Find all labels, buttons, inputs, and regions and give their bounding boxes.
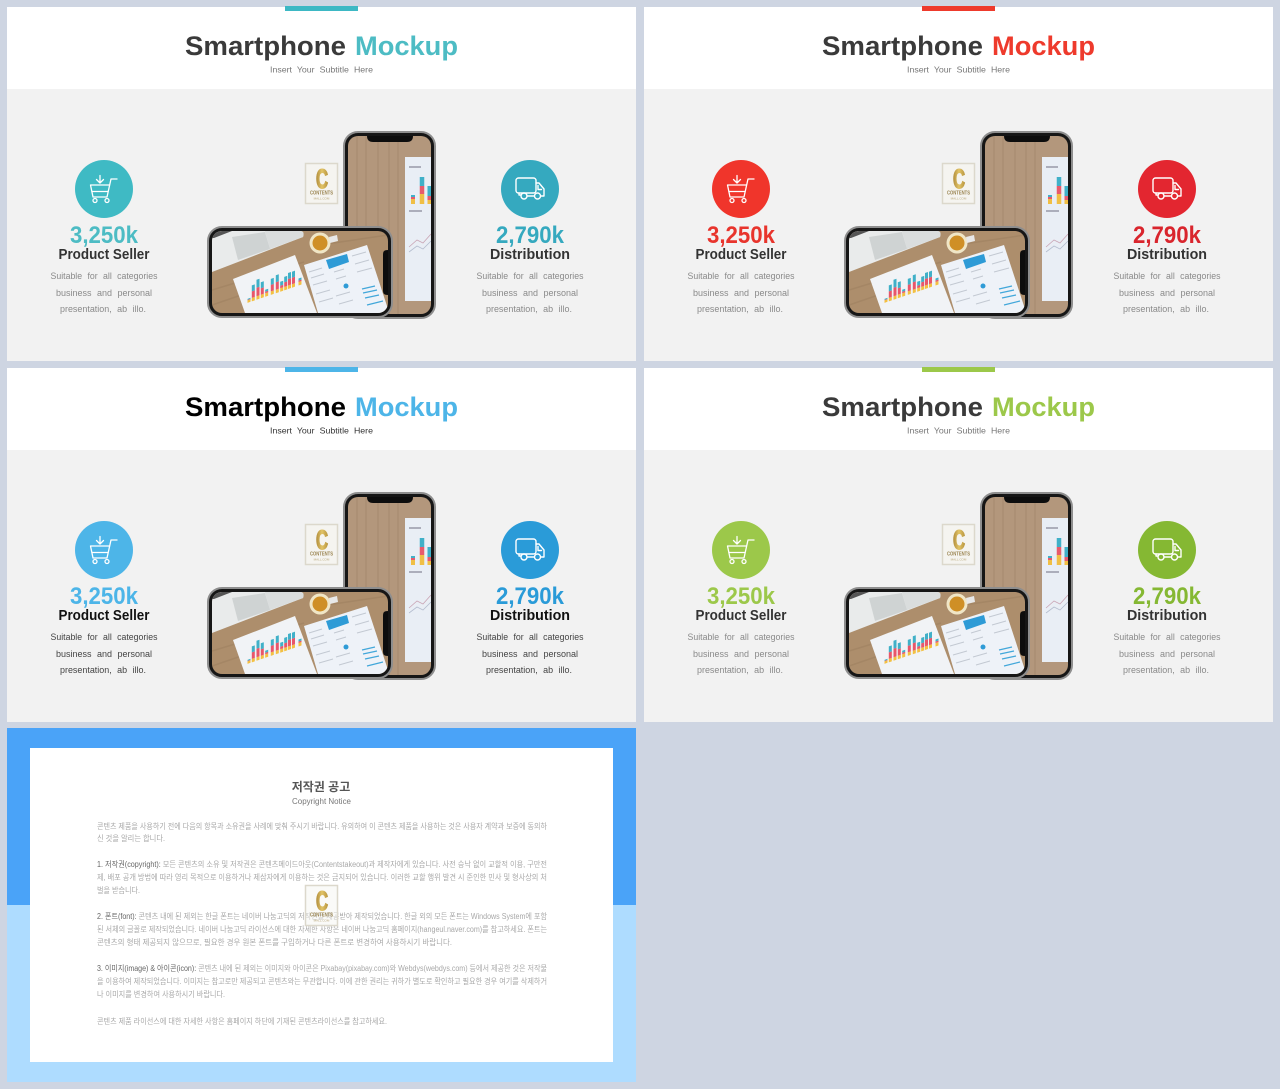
logo watermark — [942, 164, 974, 204]
phone mockups — [845, 493, 1072, 679]
text block right — [1114, 632, 1221, 675]
subtitle: Insert Your Subtitle Here — [907, 426, 1010, 436]
stat: 3,250k: 3,250k — [707, 583, 776, 610]
phone mockups — [845, 132, 1072, 318]
panel body — [644, 450, 1273, 722]
text block right — [1114, 271, 1221, 314]
clause 1: copyright: 제, 배포 공개 방법에 따라 영리 목적으로 이용하거나 제삼자에게 이용하는 것은 금지되어 있습니다. 이러한 교할 행위 발견 시 준인한 민사 및 형사상의 처 — [97, 872, 547, 882]
text block right: Suitable for all categories — [476, 271, 584, 281]
clause 1: copyright: 1. 저작권(copyright): 모든 콘텐츠의 소유 및 저작권은 콘텐츠메이드아웃(Contentstakeout)과 제작자에게 있습니다. 사전 승낙 없이 교할적 이용, 구만전 — [97, 859, 547, 869]
heading: Product Seller: Product Seller — [696, 608, 787, 624]
logo watermark: C — [316, 886, 328, 916]
title: Smartphone — [185, 31, 346, 61]
text block left: presentation, ab illo. — [60, 304, 146, 314]
subtitle: Insert Your Subtitle Here — [907, 64, 1010, 74]
logo watermark — [306, 164, 338, 204]
text block right: Suitable for all categories — [1114, 632, 1221, 642]
accent bar — [922, 6, 995, 11]
text block right: presentation, ab illo. — [486, 304, 572, 314]
intro paragraph: 콘텐츠 제품을 사용하기 전에 다음의 항목과 소유권을 사례에 맞춰 주시기 바랍니다. 유의하여 이 콘텐츠 제품을 사용하는 것은 사용자 계약과 보증에 동의하 — [97, 821, 548, 831]
icon: cart — [712, 160, 770, 218]
slide: green — [644, 367, 1273, 722]
panel header — [7, 368, 636, 450]
text block right: business and personal — [1119, 288, 1215, 298]
clause 2: font: 된 서체의 글꼴로 제작되었습니다. 네이버 나눔고딕 라이선스에 대한 자세한 사항은 네이버 나눔고딕 홈페이지(hangeul.naver.com)를 참고하세요. 폰트는 — [97, 924, 547, 934]
clause 3: image and icon — [97, 963, 547, 999]
icon: truck — [501, 160, 559, 218]
panel body — [7, 89, 636, 361]
logo watermark — [306, 886, 338, 926]
logo watermark: MALL.COM — [951, 558, 967, 562]
clause 1: copyright: 벌을 받습니다. — [97, 885, 140, 895]
text block left: Suitable for all categories — [688, 271, 795, 281]
logo watermark: MALL.COM — [314, 918, 330, 922]
icon: cart — [75, 160, 133, 218]
text block right: business and personal — [482, 649, 578, 659]
logo watermark: C — [953, 525, 965, 555]
text block left: presentation, ab illo. — [697, 304, 783, 314]
intro paragraph: 신 것을 알리는 합니다. — [97, 833, 165, 843]
stat: 3,250k: 3,250k — [70, 583, 139, 610]
logo watermark: C — [316, 164, 328, 194]
icon: cart — [75, 521, 133, 579]
title: Mockup — [992, 392, 1095, 422]
heading: Product Seller: Product Seller — [696, 247, 787, 263]
subtitle: Insert Your Subtitle Here — [270, 64, 373, 74]
clause 3: image and icon: 3. 이미지(image) & 아이콘(icon): 콘텐츠 내에 된 제외는 이미지와 아이콘은 Pixabay(pixabay.com)와 Webdys(webdys.com) 등에서 제공한 것은 저작물 — [97, 963, 547, 973]
clause 3: image and icon: 을 이용하여 제작되었습니다. 이미지는 참고로만 제공되고 콘텐츠와는 무관합니다. 이에 관한 권리는 귀하가 별도로 확인하고 필요한 경우 여기를 삭제하거 — [97, 976, 547, 986]
text block right: presentation, ab illo. — [1123, 304, 1209, 314]
clause 1: copyright — [97, 859, 547, 895]
title: Mockup — [992, 31, 1095, 61]
logo watermark — [306, 524, 338, 564]
accent bar — [285, 6, 358, 11]
stat: 2,790k: 2,790k — [496, 222, 565, 249]
text block left: Suitable for all categories — [50, 632, 158, 642]
background bottom band — [7, 905, 636, 1082]
text block left: business and personal — [56, 649, 152, 659]
title: Smartphone — [822, 31, 983, 61]
heading: Distribution: Distribution — [490, 247, 570, 263]
logo watermark: MALL.COM — [314, 196, 330, 200]
background top band — [7, 728, 636, 905]
intro paragraph — [97, 821, 548, 843]
heading: Distribution: Distribution — [1127, 247, 1207, 263]
heading: Product Seller: Product Seller — [58, 247, 150, 263]
title: Mockup — [355, 31, 458, 61]
clause 2: font: 콘텐츠의 형태 제공되지 않으므로, 필요한 경우 원본 폰트를 구입하거나 다른 폰트로 변경하여 사용하시기 바랍니다. — [97, 937, 452, 947]
icon: cart — [712, 521, 770, 579]
notice title: 저작권 공고 — [292, 779, 350, 794]
logo watermark: CONTENTS — [310, 552, 334, 558]
icon: truck — [501, 521, 559, 579]
text block left: Suitable for all categories — [50, 271, 158, 281]
text block left — [50, 271, 158, 314]
text block left — [688, 271, 795, 314]
text block left: business and personal — [693, 288, 789, 298]
panel body — [7, 450, 636, 722]
panel header — [644, 7, 1273, 89]
logo watermark: MALL.COM — [314, 558, 330, 562]
logo watermark: CONTENTS — [310, 190, 334, 196]
accent bar — [922, 367, 995, 372]
stat: 2,790k: 2,790k — [1133, 583, 1202, 610]
panel body — [644, 89, 1273, 361]
text block left: presentation, ab illo. — [697, 665, 783, 675]
panel header — [644, 368, 1273, 450]
logo watermark: CONTENTS — [947, 190, 971, 196]
slide: red — [644, 6, 1273, 361]
stat: 3,250k: 3,250k — [70, 222, 139, 249]
closing line: 콘텐츠 제품 라이선스에 대한 자세한 사항은 홈페이지 하단에 기재된 콘텐츠라이선스를 참고하세요. — [97, 1016, 387, 1026]
text block right: presentation, ab illo. — [486, 665, 572, 675]
text block right: business and personal — [1119, 649, 1215, 659]
text block right: business and personal — [482, 288, 578, 298]
text block right: Suitable for all categories — [1114, 271, 1221, 281]
logo watermark: CONTENTS — [947, 552, 971, 558]
logo watermark: MALL.COM — [951, 196, 967, 200]
logo watermark: C — [316, 525, 328, 555]
clause 2: font: 2. 폰트(font): 콘텐츠 내에 된 제외는 한글 폰트는 네이버 나눔고딕의 저작권을 제공받아 제작되었습니다. 한글 외의 모든 폰트는 Windows System에 포함 — [97, 911, 548, 921]
clause 3: image and icon: 나 이미지를 변경하여 사용하시기 바랍니다. — [97, 989, 225, 999]
text block left: business and personal — [693, 649, 789, 659]
white notice card — [30, 748, 613, 1062]
subtitle: Insert Your Subtitle Here — [270, 426, 373, 436]
heading: Distribution: Distribution — [490, 608, 570, 624]
slide: teal — [7, 6, 636, 361]
text block left: presentation, ab illo. — [60, 665, 146, 675]
heading: Distribution: Distribution — [1127, 608, 1207, 624]
logo watermark: C — [953, 164, 965, 194]
text block left — [50, 632, 158, 675]
phone mockups — [208, 132, 435, 318]
logo watermark — [942, 524, 974, 564]
title: Mockup — [355, 392, 458, 422]
panel header — [7, 7, 636, 89]
text block right: presentation, ab illo. — [1123, 665, 1209, 675]
accent bar — [285, 367, 358, 372]
stat: 2,790k: 2,790k — [496, 583, 565, 610]
panel: copyright notice — [7, 728, 636, 1082]
text block right: Suitable for all categories — [476, 632, 584, 642]
heading: Product Seller: Product Seller — [58, 608, 150, 624]
slide: blue — [7, 367, 636, 722]
text block left: Suitable for all categories — [688, 632, 795, 642]
text block right — [476, 632, 584, 675]
text block left: business and personal — [56, 288, 152, 298]
stat: 2,790k: 2,790k — [1133, 222, 1202, 249]
icon: truck — [1138, 160, 1196, 218]
text block left — [688, 632, 795, 675]
clause 2: font — [97, 911, 548, 947]
stat: 3,250k: 3,250k — [707, 222, 776, 249]
title: Smartphone — [822, 392, 983, 422]
notice subtitle: Copyright Notice — [292, 797, 352, 806]
text block right — [476, 271, 584, 314]
logo watermark: CONTENTS — [310, 912, 334, 918]
title: Smartphone — [185, 392, 346, 422]
icon: truck — [1138, 521, 1196, 579]
phone mockups — [208, 493, 435, 679]
